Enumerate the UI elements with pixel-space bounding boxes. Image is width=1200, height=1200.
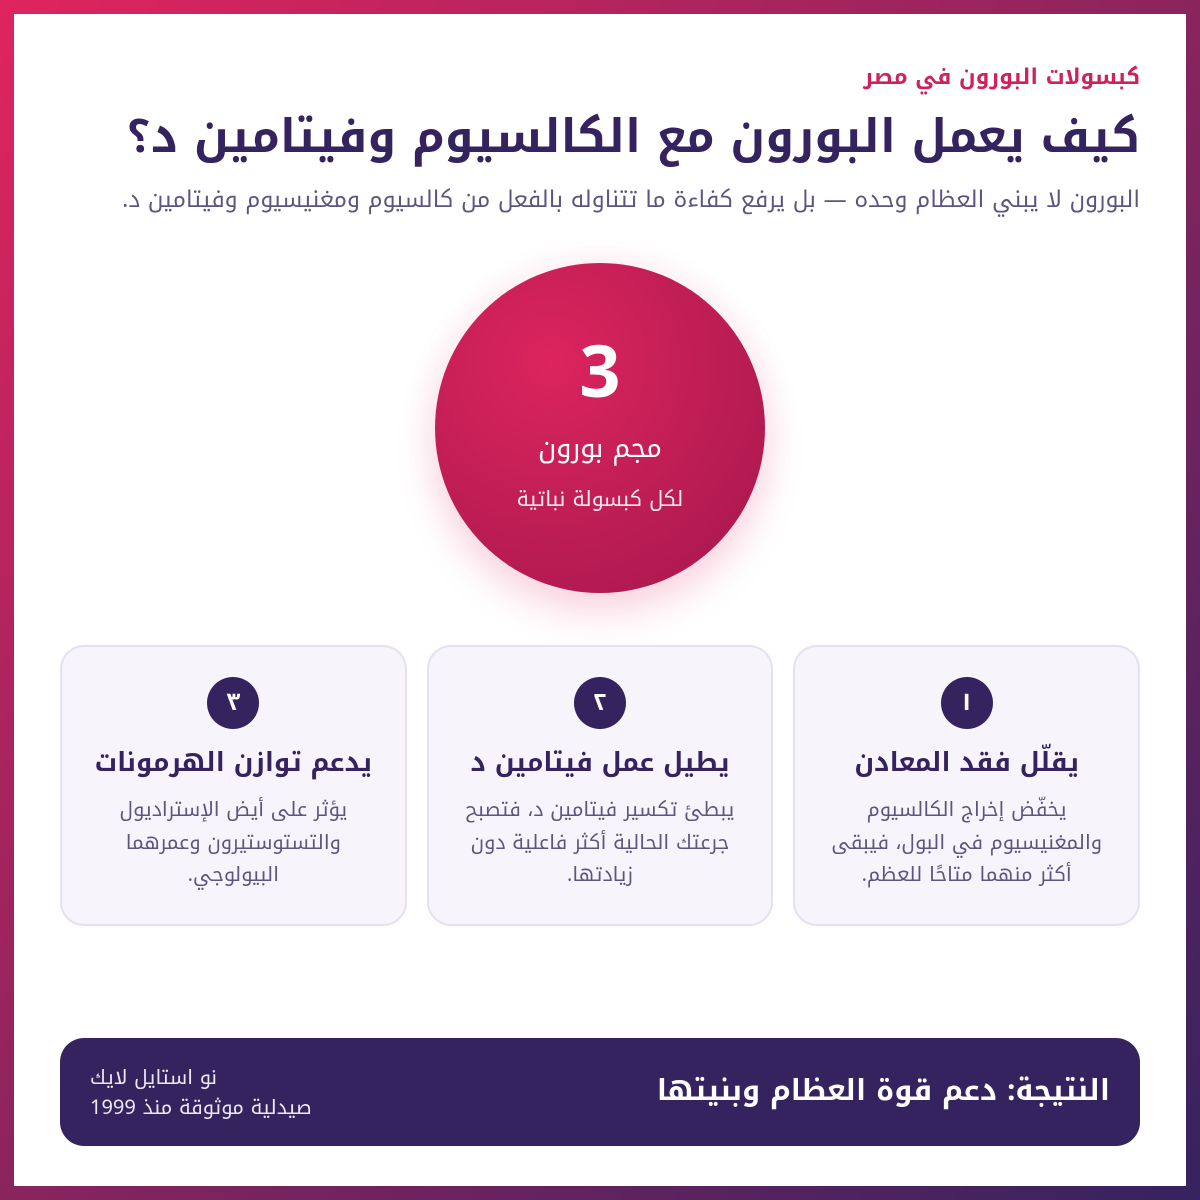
number badge 1 [941,677,993,729]
dose unit: مجم بورون [538,422,662,474]
eyebrow heading: كبسولات البورون في مصر [863,56,1140,98]
card 3 text [119,791,347,894]
pharmacy credit [90,1059,312,1127]
panel: card 3 hormone balance [60,645,407,926]
card 3 text: والتستوستيرون وعمرهما [126,824,341,862]
number badge 2: ٢ [593,679,607,725]
pharmacy credit: صيدلية موثوقة منذ 1999 [90,1089,312,1127]
card 1 text: يخفّض إخراج الكالسيوم [867,791,1067,829]
number badge 1: ١ [960,679,974,725]
central dose circle [435,263,765,593]
dose number: 3 [579,306,621,442]
card 3 heading: يدعم توازن الهرمونات [95,738,372,787]
card 2 text: جرعتك الحالية أكثر فاعلية دون [471,824,729,862]
card 2 text [466,791,734,894]
number badge 3 [207,677,259,729]
card 2 text: زيادتها. [567,856,633,894]
card 2 text: يبطئ تكسير فيتامين د، فتصبح [466,791,734,829]
card 1 text: والمغنيسيوم في البول، فيبقى [831,824,1102,862]
card 1 text: أكثر منهما متاحًا للعظم. [862,856,1072,894]
pharmacy credit: نو استايل لايك [90,1059,217,1097]
card 3 text: البيولوجي. [188,856,279,894]
number badge 3: ٣ [226,679,240,725]
panel: card 2 extends vitamin D [427,645,773,926]
subtitle: البورون لا يبني العظام وحده — بل يرفع كفاءة ما تتناوله بالفعل من كالسيوم ومغنيسيوم وفيتامين د. [122,179,1140,222]
card 1 heading: يقلّل فقد المعادن [854,738,1079,787]
card 3 text: يؤثر على أيض الإستراديول [119,791,347,829]
result bar [60,1038,1140,1146]
panel: card 1 reduces mineral loss [793,645,1140,926]
card 1 text [831,791,1102,894]
title: كيف يعمل البورون مع الكالسيوم وفيتامين د؟ [126,94,1140,181]
number badge 2 [574,677,626,729]
card 2 heading: يطيل عمل فيتامين د [470,738,730,787]
result statement: النتيجة: دعم قوة العظام وبنيتها [657,1063,1110,1118]
dose note: لكل كبسولة نباتية [517,479,683,519]
